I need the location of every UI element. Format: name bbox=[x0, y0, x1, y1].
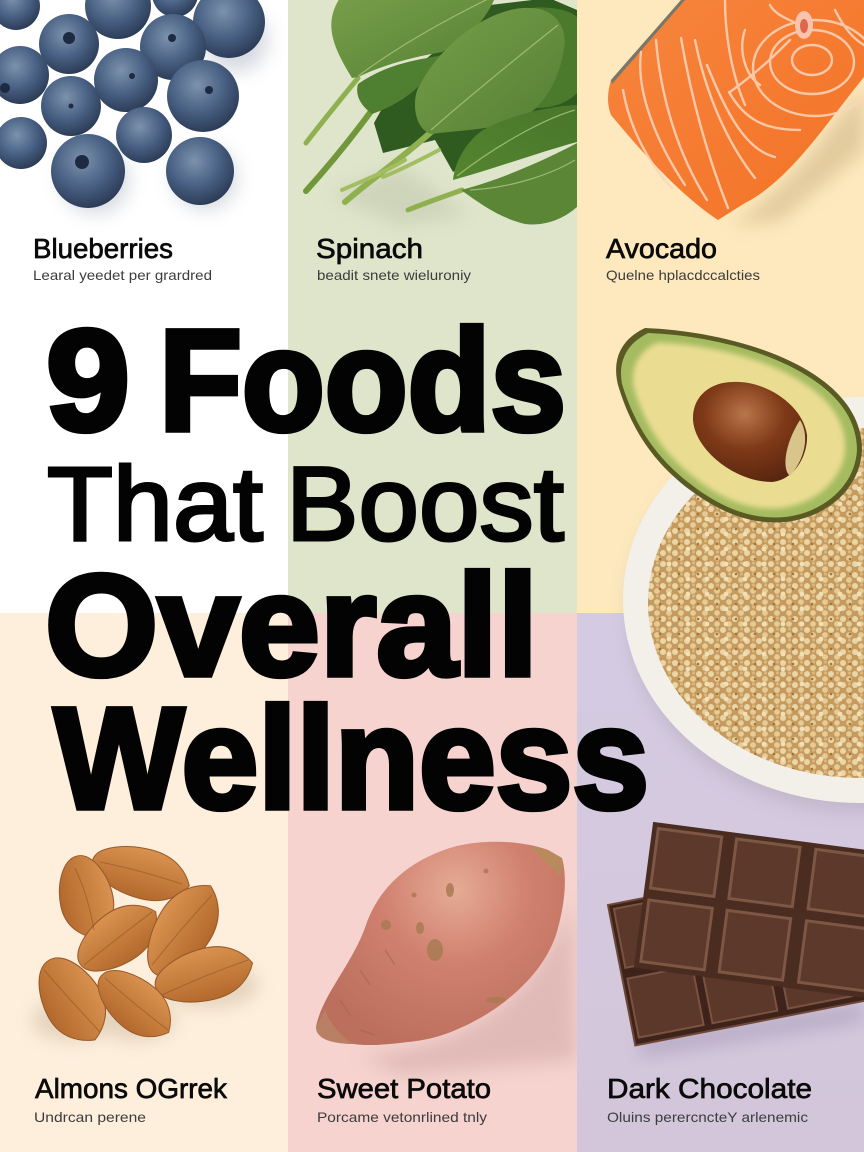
label: dark chocolate: Dark Chocolate bbox=[607, 1073, 812, 1104]
icon: sweet potato bbox=[316, 842, 577, 1075]
title bbox=[45, 300, 649, 839]
label: avocado: Quelne hplacdccalcties bbox=[606, 267, 760, 283]
panel: salmon and avocado bbox=[577, 0, 864, 613]
label: sweet potato: Sweet Potato bbox=[317, 1073, 491, 1104]
panel: sweet potato bbox=[288, 613, 577, 1152]
title: 9 bbox=[46, 300, 130, 461]
icon: chocolate bars bbox=[608, 822, 864, 1055]
label: blueberries: Learal yeedet per grardred bbox=[33, 267, 212, 283]
label: blueberries bbox=[33, 233, 212, 283]
icon: quinoa bowl bbox=[623, 397, 864, 812]
title: Boost bbox=[286, 446, 564, 563]
icon: salmon fillet bbox=[608, 0, 864, 225]
icon: blueberries bbox=[0, 0, 268, 214]
label: blueberries: Blueberries bbox=[33, 233, 173, 264]
title: That bbox=[47, 446, 263, 563]
label: almonds: Almons OGrrek bbox=[35, 1073, 228, 1104]
upper chocolate bar bbox=[634, 822, 864, 999]
label: almonds bbox=[34, 1073, 228, 1125]
label: sweet potato bbox=[317, 1073, 491, 1125]
title: Overall bbox=[45, 545, 538, 706]
label: sweet potato: Porcame vetonrlined tnly bbox=[317, 1109, 487, 1125]
label: almonds: Undrcan perene bbox=[34, 1109, 146, 1125]
title: Wellness bbox=[54, 678, 649, 839]
icon: avocado half bbox=[616, 328, 862, 522]
panel: spinach bbox=[288, 0, 577, 613]
label: avocado: Avocado bbox=[606, 233, 717, 264]
label: spinach bbox=[316, 233, 471, 283]
icon: spinach leaves bbox=[306, 0, 577, 225]
label: spinach: beadit snete wieluroniy bbox=[317, 267, 471, 283]
panel: dark chocolate bbox=[577, 613, 864, 1152]
title: Foods bbox=[159, 300, 566, 461]
label: avocado bbox=[606, 233, 760, 283]
label: dark chocolate bbox=[607, 1073, 812, 1125]
label: dark chocolate: Oluins perercncteY arlenemic bbox=[607, 1109, 808, 1125]
label: spinach: Spinach bbox=[316, 233, 423, 264]
panel: blueberries bbox=[0, 0, 288, 613]
lower chocolate bar bbox=[608, 850, 864, 1045]
panel: almonds bbox=[0, 613, 288, 1152]
icon: almonds bbox=[24, 836, 259, 1054]
